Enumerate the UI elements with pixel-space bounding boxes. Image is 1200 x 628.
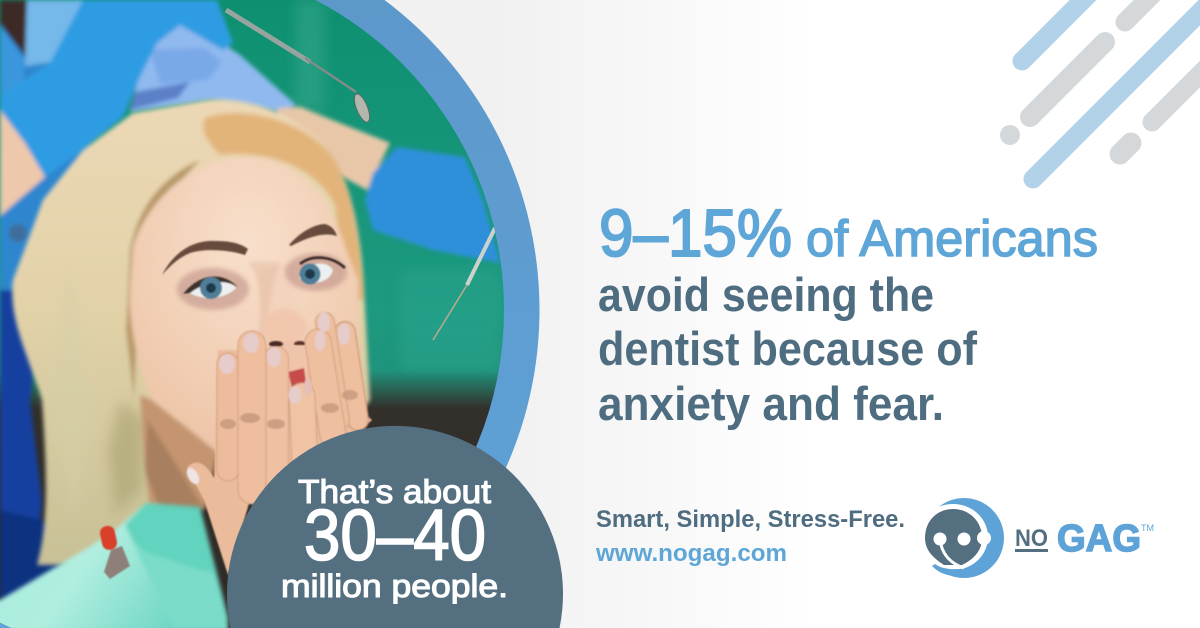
hands over mouth [184, 312, 372, 575]
logo wordmark: TM [1141, 523, 1154, 533]
bubble text: That’s about [298, 473, 491, 510]
headline: of Americans [806, 210, 1098, 267]
photo: shocked woman at the dentist [0, 0, 520, 628]
bib clip [99, 525, 130, 579]
tagline: Smart, Simple, Stress-Free. [596, 506, 905, 533]
logo wordmark: GAG [1057, 518, 1141, 560]
logo wordmark: NO [1015, 525, 1048, 552]
stat bubble [227, 426, 563, 628]
decorative diagonal stripes [1000, 0, 1200, 179]
bubble text: million people. [281, 568, 508, 604]
headline: anxiety and fear. [598, 377, 944, 430]
logo: No Gag [918, 498, 1154, 578]
eyebrows [162, 224, 337, 275]
blue circular ring [0, 0, 539, 628]
dental bib [0, 503, 228, 628]
bubble text: 30–40 [304, 496, 486, 576]
headline: dentist because of [598, 322, 977, 375]
left eye [177, 268, 249, 310]
headline [598, 196, 1098, 430]
dental mirror [226, 10, 373, 124]
probe tip [433, 285, 467, 340]
headline: avoid seeing the [598, 268, 934, 321]
nostrils and lips [269, 341, 306, 347]
logo wordmark [1015, 518, 1154, 560]
headline: 9–15% [599, 196, 792, 271]
right eye [285, 253, 347, 291]
logo mark [918, 498, 1004, 578]
website: www.nogag.com [595, 540, 787, 567]
dental probe [467, 228, 495, 285]
woman [12, 99, 370, 565]
bubble text [281, 473, 508, 604]
